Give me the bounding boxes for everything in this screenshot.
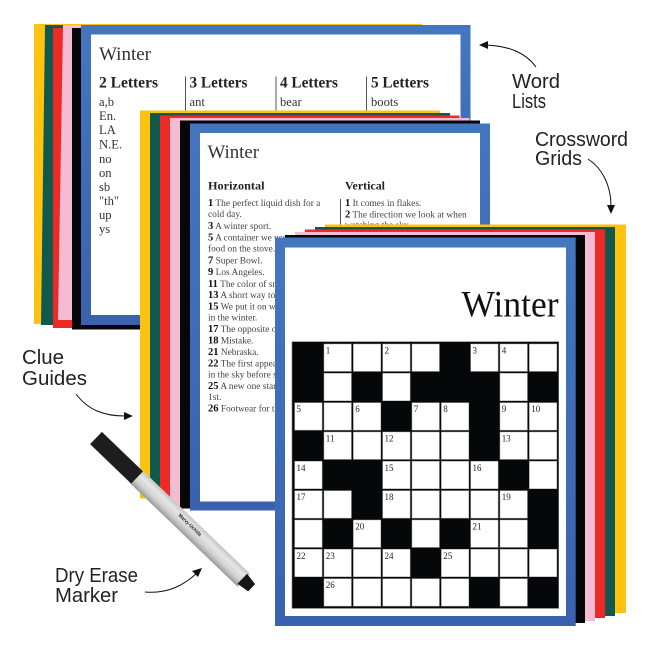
green clue sheet: [150, 113, 450, 501]
pink clue sheet: [170, 118, 470, 506]
crossword grid: 12: [384, 434, 394, 444]
crossword grid: 11: [326, 434, 334, 444]
column: 3 letters: [185, 74, 248, 112]
red clue sheet: [160, 116, 460, 504]
column: 2 letters: LA: [99, 123, 116, 137]
yellow grid sheet: [325, 224, 626, 613]
vertical clues: Vertical: [345, 178, 386, 192]
vertical clues: 1 It comes in flakes.: [345, 198, 421, 209]
horizontal clues: 22 The first appears: [208, 358, 284, 370]
column: 4 letters: 4 Letters: [280, 74, 338, 92]
horizontal clues: 7 Super Bowl.: [208, 256, 262, 266]
marker label: Marvy-Uchida: [177, 513, 203, 538]
arrow: to marker: [145, 568, 202, 592]
horizontal clues: 15 We put it on when: [208, 302, 289, 312]
green backing sheet: [41, 25, 432, 325]
horizontal clues: cold day.: [208, 210, 242, 220]
marker cap: [90, 432, 143, 484]
horizontal clues: 1 The perfect liquid dish for a: [208, 198, 321, 209]
crossword grid: 22: [296, 551, 306, 561]
horizontal clues: 18 Mistake.: [208, 336, 253, 346]
yellow backing sheet: [34, 24, 422, 324]
pink grid sheet: [295, 232, 595, 621]
crossword grid: 19: [502, 492, 511, 502]
crossword grid: 7: [414, 404, 419, 414]
marker tip: [237, 574, 256, 593]
crossword grid: 15: [384, 463, 394, 473]
label: crossword grids: Grids: [535, 147, 582, 170]
panel: clue guides stack: [140, 110, 490, 510]
horizontal clues: 21 Nebraska.: [208, 347, 259, 358]
column: 4 letters: bear: [280, 95, 302, 109]
marker body: [129, 470, 250, 587]
blue grid card: [275, 238, 576, 626]
horizontal clues: 3 A winter sport.: [208, 221, 271, 232]
vertical clues: watching the sky.: [345, 221, 410, 231]
black clue sheet: [180, 120, 480, 508]
column: 2 letters: N.E.: [99, 138, 122, 152]
pink backing sheet: [58, 25, 465, 320]
icon: dry erase marker: [90, 432, 258, 594]
horizontal clues: 9 Los Angeles.: [208, 267, 265, 278]
label: word lists: Lists: [512, 90, 546, 113]
blue word list card: [81, 25, 470, 325]
crossword grid: 26: [326, 580, 335, 590]
crossword grid: 17: [296, 492, 306, 502]
horizontal clues: Horizontal: [208, 178, 265, 192]
label: dry erase marker: Marker: [55, 584, 118, 607]
label: word lists: [512, 70, 560, 113]
blue clue card: [190, 124, 490, 510]
label: crossword grids: Crossword: [535, 128, 628, 151]
yellow clue sheet: [140, 110, 440, 498]
label: clue guides: Clue: [22, 346, 64, 369]
crossword grid: 6: [355, 404, 360, 414]
horizontal clues: 5 A container we use: [208, 232, 287, 244]
clue guide title: Winter: [208, 142, 260, 163]
crossword grid: [292, 342, 559, 608]
white word list page: [91, 34, 460, 315]
horizontal clues: 11 The color of snow.: [208, 279, 290, 290]
column: 2 letters: on: [99, 166, 112, 180]
crossword grid: 2: [384, 346, 389, 356]
column: 2 letters: up: [99, 208, 112, 222]
crossword grid: 21: [472, 522, 482, 532]
horizontal clues: 1st.: [208, 393, 221, 403]
column: 2 letters: En.: [99, 109, 116, 123]
horizontal clues: 25 A new one starts: [208, 381, 283, 392]
crossword grid: 25: [443, 551, 453, 561]
column: 3 letters: 3 Letters: [190, 74, 248, 92]
vertical clues: 2 The direction we look at when: [345, 210, 467, 220]
horizontal clues: [208, 178, 321, 414]
arrow: to clue guides: [76, 394, 133, 420]
white grid page: [285, 248, 566, 616]
panel: word lists stack: [34, 24, 470, 330]
panel: crossword grids stack: [275, 224, 626, 626]
column: 5 letters: 5 Letters: [371, 74, 429, 92]
crossword grid: 5: [296, 404, 302, 414]
column: 2 letters: "th": [99, 194, 119, 208]
crossword grid: 10: [531, 404, 541, 414]
label: clue guides: [22, 346, 87, 390]
column: 2 letters: [99, 74, 158, 236]
crossword grid: 23: [326, 551, 335, 561]
column: 2 letters: no: [99, 152, 112, 166]
label: crossword grids: [535, 128, 628, 170]
vertical clues: [340, 178, 467, 231]
label: word lists: Word: [512, 70, 560, 93]
column: 2 letters: ys: [99, 222, 110, 236]
column: 2 letters: 2 Letters: [99, 74, 158, 92]
crossword grid: 13: [502, 434, 511, 444]
crossword grid: 8: [443, 404, 448, 414]
crossword grid: 4: [502, 346, 507, 356]
red backing sheet: [53, 28, 453, 328]
column: 2 letters: sb: [99, 180, 110, 194]
black grid sheet: [285, 235, 585, 623]
column: 3 letters: ant: [190, 95, 205, 109]
horizontal clues: in the winter.: [208, 314, 257, 324]
column: 5 letters: [366, 74, 429, 112]
crossword grid: 20: [355, 522, 365, 532]
arrow: to crossword grids: [588, 159, 615, 214]
arrow: to word lists: [479, 41, 536, 67]
crossword title: Winter: [462, 284, 558, 326]
label: dry erase marker: [55, 564, 138, 607]
crossword grid: 16: [472, 463, 482, 473]
white clue page: [200, 133, 480, 502]
crossword grid: 18: [384, 492, 394, 502]
label: dry erase marker: Dry Erase: [55, 564, 138, 587]
horizontal clues: 13 A short way to: [208, 290, 276, 301]
crossword grid: 14: [296, 463, 306, 473]
horizontal clues: food on the stove.: [208, 244, 275, 254]
column: 4 letters: [276, 74, 338, 112]
crossword grid: 24: [384, 551, 394, 561]
horizontal clues: 17 The opposite of: [208, 324, 280, 335]
crossword grid: 3: [472, 346, 478, 356]
crossword grid: 1: [326, 346, 330, 356]
crossword grid: 9: [502, 404, 507, 414]
word list title: Winter: [99, 44, 152, 65]
column: 5 letters: boots: [371, 95, 398, 109]
red grid sheet: [305, 230, 605, 618]
horizontal clues: 26 Footwear for the: [208, 404, 283, 414]
black backing sheet: [72, 28, 470, 330]
column: 2 letters: a,b: [99, 95, 114, 109]
horizontal clues: in the sky before sun: [208, 370, 286, 380]
green grid sheet: [315, 227, 615, 616]
label: clue guides: Guides: [22, 367, 87, 390]
